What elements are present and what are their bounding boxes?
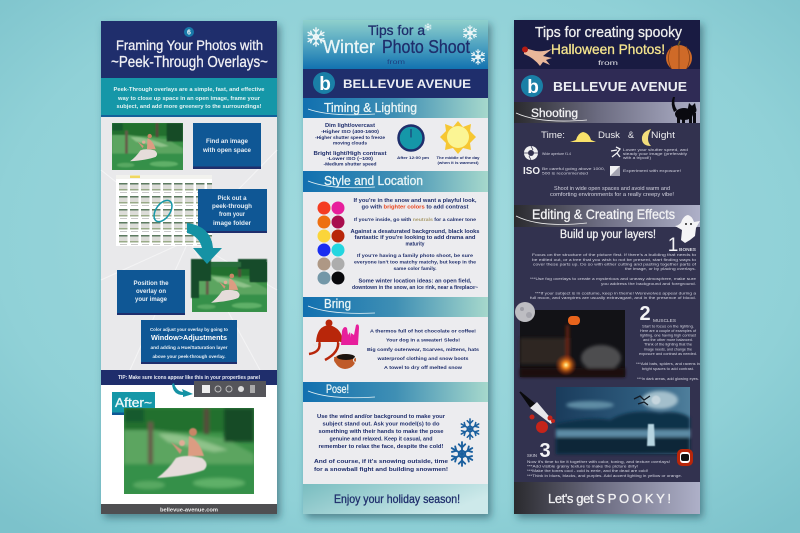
pose tips — [314, 414, 448, 473]
step 1: bones: Focus on the structure of the picture first. If there's a building that needs to — [532, 252, 697, 257]
title banner — [101, 21, 277, 78]
shooting note: Shoot in wide open spaces and avoid warm and — [554, 186, 670, 192]
steps area — [101, 117, 277, 370]
bring list — [367, 328, 479, 371]
icon: red hat — [309, 320, 343, 360]
exposure text: Experiment with exposure! — [623, 168, 681, 173]
intro text band: Peek-Through overlays are a simple, fast, and effective — [114, 87, 265, 93]
pose tips: remember to relax the face, despite the cold! — [318, 444, 444, 450]
icon: black cat — [672, 97, 696, 123]
title area: Photo Shoot — [382, 37, 470, 57]
step 2: muscles: Start to focus on the lighting. — [642, 324, 694, 328]
lighting text: -Higher shutter speed to freeze — [315, 135, 385, 140]
step 2: muscles: Think of the lighting that the — [644, 342, 693, 346]
colour swatches — [318, 202, 344, 284]
panel: peek-through overlays — [101, 21, 277, 514]
icon: coffee cup — [334, 354, 358, 369]
bring list: Big comfy outerwear, Scarves, mittens, hats — [367, 347, 479, 353]
step 1: bones: BONES — [679, 247, 696, 252]
title area: Winter — [323, 37, 375, 57]
aperture text: Wide aperture f1.4 — [542, 151, 572, 156]
step: find an image: Find an image — [206, 138, 248, 145]
step: position the overlay — [117, 270, 185, 315]
section: bring — [303, 297, 488, 371]
brand band: b — [319, 74, 331, 95]
shooting note — [550, 186, 674, 198]
lighting text: Bright light/High contrast — [314, 151, 387, 157]
pose tips: And of course, if it's snowing outside, time — [314, 459, 448, 465]
icon: snowflakes — [308, 23, 484, 64]
iso text: Be careful going above 1000, — [542, 166, 605, 171]
title area: Tips for a — [368, 22, 425, 38]
step 1: bones: cover these parts up. Do so with either cutting and pasting together parts of — [533, 262, 697, 266]
after label: After~ — [115, 395, 152, 410]
pose tips: for a snowball fight and building snowmen! — [314, 467, 448, 473]
pose tips: genuine and relaxed. Keep it casual, and — [330, 436, 432, 442]
section: pose: Pose! — [326, 384, 349, 396]
step 2: muscles — [636, 303, 700, 381]
step 2: muscles: image needs, and change the — [644, 346, 693, 352]
closing banner — [303, 484, 488, 514]
section: shooting: Shooting — [531, 108, 578, 120]
closing banner — [514, 482, 700, 514]
lighting text — [314, 123, 387, 166]
step 3: skin: SKIN — [527, 453, 537, 458]
bring list: A thermos full of hot chocolate or coffee! — [370, 328, 476, 334]
shutter text: steady your image (preferably — [623, 151, 687, 156]
icon: vampire mouth — [677, 449, 693, 466]
icon: sun: The middle of the day — [436, 156, 480, 160]
step: pick out a peek-through: Pick out a — [218, 195, 247, 202]
style tips text: maturity — [406, 242, 424, 248]
icon: pumpkin — [666, 41, 692, 71]
section: timing and lighting: Timing & Lighting — [324, 101, 417, 115]
build up heading: Build up your layers! — [560, 229, 656, 241]
time row: Time: — [541, 130, 565, 140]
step 1: bones: ***If your subject is in costume, keep in theme! Werewolves appear during a — [535, 290, 697, 296]
tip bar: TIP: Make sure icons appear like this in your properties panel — [118, 375, 261, 381]
style tips text: fantastic if you're looking to add drama and — [354, 235, 476, 241]
step: position the overlay: your image — [135, 296, 167, 303]
step 3: skin: ***Add visible grainy texture to make the picture dirty! — [527, 464, 638, 468]
title banner: ~Peek-Through Overlays~ — [111, 54, 268, 71]
icon: pink mittens — [341, 324, 359, 345]
step: pick out a peek-through: from your — [219, 211, 245, 218]
step: find an image: with open space — [202, 147, 251, 154]
pose tips: subject stand out. Ask your model(s) to do — [322, 422, 440, 428]
panel: halloween photos — [514, 20, 700, 514]
section: editing — [514, 205, 700, 514]
step: pick out a peek-through — [198, 189, 267, 233]
step 3: skin — [527, 440, 682, 478]
time row: & — [628, 130, 634, 140]
step 3: skin: ***Think in blues, blacks, and purples. Add accent lighting in yellow or orange. — [527, 473, 682, 478]
lighting text: -Medium shutter speed — [324, 162, 377, 166]
footer url — [101, 504, 277, 514]
style tips text: go with brighter colors to add contrast — [362, 204, 469, 210]
step 2: muscles: 2 — [639, 303, 651, 325]
section: style and location: Style and Location — [324, 174, 423, 188]
time row: Night — [651, 130, 676, 140]
lighting text: -Lower ISO (~100) — [327, 156, 374, 161]
style tips text: If you're inside, go with neutrals for a calmer tone — [354, 217, 477, 222]
icon: severed hand — [522, 46, 552, 66]
photo with overlay — [191, 259, 267, 312]
icon: clock — [397, 126, 429, 160]
bring list: waterproof clothing and snow boots — [376, 356, 469, 362]
style tips text: downtown in the snow, an ice rink, near a fireplace~ — [352, 285, 478, 291]
closing banner: Let's get S P O O K Y ! — [548, 491, 671, 506]
step 1: bones: you address the background and foreground. — [601, 281, 696, 286]
title banner: 6 — [187, 30, 191, 36]
panel: winter photo shoot — [303, 20, 488, 514]
image folder screenshot — [116, 175, 212, 246]
time row — [541, 130, 676, 140]
brand band — [303, 69, 488, 98]
step 2: muscles: ***Add bats, spiders, and ravens in — [636, 361, 700, 366]
icon: ghost — [675, 215, 700, 243]
style tips text: Against a desaturated background, black looks — [350, 229, 480, 235]
style tips text: If you're in the snow and want a playful look, — [354, 198, 477, 204]
step: color adjust: Color adjust your overlay by going to — [150, 327, 228, 333]
title area: Tips for creating spooky — [535, 24, 682, 41]
dark pumpkin photo — [520, 310, 625, 377]
style tips text: everyone isn't too matchy matchy, but keep in the — [354, 260, 477, 264]
step 2: muscles: lighting, one having high contrast — [640, 332, 697, 338]
step: color adjust: and adding a Hue/Saturation layer — [150, 345, 228, 351]
title area: from — [598, 60, 618, 67]
footer url: bellevue-avenue.com — [160, 508, 218, 514]
step 2: muscles: ***In dark areas, add glowing eyes. — [637, 376, 699, 381]
lighting text: -Higher ISO (400-1600) — [321, 129, 380, 134]
after label — [112, 392, 155, 415]
step 3: skin: Now it's time to tie it together with color, toning, and texture overlays! — [527, 459, 670, 464]
icon: bloody knife — [520, 392, 555, 433]
intro text band — [101, 78, 277, 117]
style tips text — [350, 198, 480, 291]
step 2: muscles: exposure and contrast as needed. — [639, 351, 697, 356]
time row: Dusk — [598, 130, 621, 140]
title area: from — [387, 60, 405, 66]
step: color adjust: above your peek-through overlay. — [152, 354, 226, 360]
arrow: teal curved — [187, 223, 222, 264]
step 1: bones: the image, or by placing overlays. — [625, 266, 696, 271]
icon: sun: (when it is warmest) — [438, 161, 479, 165]
brand band: b — [527, 77, 539, 98]
step 2: muscles: bright spaces to add contrast. — [642, 366, 694, 371]
title area — [514, 20, 700, 71]
original photo — [112, 123, 183, 170]
step 3: skin: 3 — [539, 440, 551, 462]
step: color adjust: Window>Adjustments — [151, 335, 227, 342]
icon: crescent moon — [642, 129, 651, 146]
step: color adjust — [141, 320, 237, 364]
title area — [303, 20, 488, 69]
pose tips: Use the wind and/or background to make your — [317, 414, 445, 420]
closing banner: Enjoy your holiday season! — [334, 492, 460, 506]
pose tips: something with their hands to make the pose — [318, 429, 444, 435]
intro text band: subject, and add more greenery to the surroundings! — [116, 104, 262, 110]
step: pick out a peek-through: image folder — [213, 220, 251, 227]
step 2: muscles: and the other more balanced. — [643, 337, 693, 342]
step 1: bones: full moon, and vampires are usually extravagant, and in the presence of blood. — [530, 295, 696, 300]
icon: aperture — [524, 146, 538, 160]
step: position the overlay: Position the — [134, 280, 169, 287]
icon: clock: After 12:00 pm — [397, 155, 429, 160]
tip bar — [101, 370, 277, 385]
step 1: bones: be edited out, or a tree that you wish to not be present, start finding ways to — [532, 257, 697, 262]
lighting text: moving clouds — [333, 140, 367, 146]
bring list: A towel to dry off melted snow — [384, 365, 462, 371]
brand band: BELLEVUE AVENUE — [553, 80, 687, 94]
section: shooting — [514, 97, 700, 198]
section: pose — [303, 382, 488, 473]
section: editing: Editing & Creating Effects — [532, 207, 675, 222]
icon: sun — [436, 121, 480, 165]
step 2: muscles: MUSCLES — [653, 318, 676, 323]
iso text: 500 is recommended — [542, 170, 588, 176]
icon: exposure — [610, 166, 620, 176]
style tips text: Some winter location ideas: an open field, — [358, 278, 472, 284]
title banner: Framing Your Photos with — [116, 37, 263, 53]
section: bring: Bring — [324, 297, 351, 311]
intro text band: way to close up space in an open image, frame your — [117, 96, 261, 102]
arrow: tip — [172, 383, 193, 397]
icon: blue snowflakes — [452, 419, 479, 466]
blue forest photo — [556, 387, 690, 454]
icon: runner — [611, 147, 620, 157]
section: timing and lighting — [303, 98, 488, 166]
icon: moon — [515, 302, 535, 322]
step: position the overlay: overlay on — [136, 288, 166, 295]
brand band — [514, 69, 700, 102]
step 3: skin: ***Make the tones cool - cold is eerie, and the dead are cold! — [527, 468, 648, 473]
step 1: bones: ***Use fog overlays to create a mysterious and uneasy atmosphere, make sure — [530, 276, 697, 281]
step: pick out a peek-through: peek-through — [212, 203, 252, 210]
shooting note: comforting environments for a really creepy vibe! — [550, 192, 674, 198]
properties panel icons — [194, 381, 266, 397]
style tips text: If you're having a family photo shoot, be sure — [357, 253, 474, 258]
title area: Halloween Photos! — [551, 41, 665, 57]
brand band: BELLEVUE AVENUE — [343, 77, 471, 91]
step 2: muscles: Here are a couple of examples of — [640, 328, 697, 333]
step: find an image — [193, 123, 261, 169]
icon: ISO: ISO — [523, 166, 540, 177]
shutter text: Lower your shutter speed, and — [623, 147, 688, 152]
step 1: bones — [530, 235, 697, 300]
icon: dusk sun — [570, 132, 596, 142]
style tips text: same color family. — [394, 266, 436, 271]
after photo — [124, 408, 254, 494]
bring list: Your dog in a sweater! Sleds! — [386, 338, 460, 344]
shutter text: with a tripod!) — [623, 155, 652, 160]
step 1: bones: 1 — [668, 235, 678, 256]
iso text — [542, 166, 605, 176]
section: style and location — [303, 171, 488, 291]
lighting text: Dim light/overcast — [325, 123, 375, 129]
shutter text — [623, 147, 688, 160]
